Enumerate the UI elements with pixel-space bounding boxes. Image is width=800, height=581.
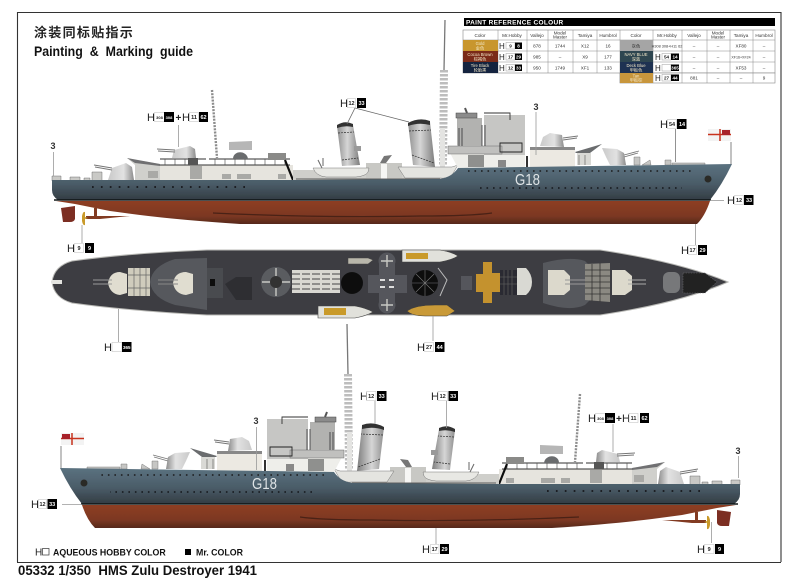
callout stern number 3 lower — [735, 446, 741, 478]
callout funnel lower aft: 33 — [450, 394, 456, 400]
legend: Mr. COLOR — [196, 548, 244, 558]
table row: Tan codes: 27 — [664, 76, 669, 80]
callout funnel lower aft — [431, 391, 458, 428]
table row: Gold codes: 9 — [509, 44, 512, 48]
callout upper aft: H308 + H11: H — [182, 112, 190, 124]
callout H17 upper — [681, 224, 707, 257]
callout lower aft: H308 + H11: 308 — [607, 416, 614, 421]
table row: Cocoa Brown codes: H — [499, 53, 505, 62]
callout H17 upper: H — [681, 245, 689, 257]
aft mast — [212, 90, 217, 158]
stern fittings plan — [52, 280, 62, 284]
paint reference table: Cocoa Brown — [467, 52, 493, 57]
portholes: forward upper row — [468, 170, 693, 172]
callout lower aft: H308 + H11 — [588, 413, 649, 452]
table row: Tire Black codes: 12 — [508, 66, 513, 70]
paint reference table: X12 — [581, 44, 590, 48]
title block: 涂装同标贴指示 — [34, 25, 134, 40]
paint reference table: Color — [631, 33, 642, 38]
torpedo deck plan — [292, 270, 340, 293]
bow mesh plan — [683, 273, 717, 293]
table row: Deck Blue codes — [655, 64, 679, 73]
table row: Navy Blue codes: H — [655, 53, 661, 62]
paint reference table: Humbrol — [755, 33, 773, 38]
paint reference table: 棕褐色 — [474, 56, 487, 62]
callout H12 bow upper: 12 — [736, 198, 742, 204]
paint reference table: Master — [553, 34, 567, 40]
turret Y plan — [93, 268, 150, 296]
portholes: aft row — [92, 186, 250, 188]
upper ship: port side profile — [52, 20, 732, 225]
callout H27 plan: H — [417, 342, 425, 354]
table row: Tire Black codes — [499, 64, 522, 73]
paint reference table: Tan — [633, 74, 640, 78]
boat plan: top with gold — [402, 250, 458, 262]
title block — [34, 25, 193, 59]
bridge plan gold — [461, 262, 532, 303]
turret A — [602, 148, 639, 165]
callout H17 lower: H — [422, 544, 430, 556]
table row: Gold codes: 8 — [517, 44, 520, 48]
paint reference table: 1749 — [555, 66, 566, 70]
aft lobe — [150, 258, 207, 310]
callout upper aft: H308 + H11: 308 — [166, 115, 173, 120]
paint reference table: 9 — [763, 76, 766, 80]
callout lower aft: H308 + H11: H — [622, 413, 630, 425]
director tower — [229, 141, 252, 150]
table row: Tire Black codes: H — [499, 64, 505, 73]
paint reference table: Master — [711, 34, 725, 40]
callout funnel lower aft: 12 — [440, 394, 446, 400]
paint reference table: Vallejo — [687, 33, 701, 38]
midships deckhouse and boats — [293, 155, 458, 180]
paint reference table: Humbrol — [599, 33, 617, 38]
paint reference table: – — [763, 54, 766, 60]
callout H12 bow lower: H — [31, 499, 39, 511]
paint reference table: Tamiya — [734, 33, 749, 38]
table row: Cocoa Brown codes — [499, 53, 522, 62]
callout funnel lower forward: 33 — [379, 394, 385, 400]
paint reference table: PAINT REFERENCE COLOUR — [466, 20, 563, 26]
paint reference table: 133 — [604, 66, 612, 70]
table row: Deck Blue codes: 365 — [671, 66, 679, 70]
callout H12 bow lower — [31, 499, 82, 511]
callout stern number 3 upper — [50, 141, 56, 176]
boat plan: forward gold — [407, 305, 455, 316]
callout H12 bow upper — [710, 195, 754, 207]
paint reference table: – — [763, 44, 766, 48]
callout H365 plan: H — [104, 342, 112, 354]
bilge keel — [213, 213, 492, 217]
capstan plan — [663, 272, 680, 293]
callout upper aft: H308 + H11: + — [176, 113, 182, 124]
footer product line: 05332 1/350 HMS Zulu Destroyer 1941 — [18, 563, 257, 578]
callout propeller upper: 9 — [88, 246, 91, 252]
callout stern number 3 lower: 3 — [735, 446, 741, 456]
paint reference table: – — [763, 66, 766, 70]
hatched deck plan — [585, 263, 610, 302]
funnel one plan — [341, 272, 363, 294]
callout lower aft: H308 + H11: + — [616, 414, 622, 425]
turret Y — [94, 163, 134, 180]
forward lobe — [543, 259, 597, 308]
deck outline — [52, 250, 728, 315]
funnel two — [408, 119, 435, 167]
callout H17 lower — [422, 528, 449, 556]
hull lower: red — [56, 201, 710, 224]
paint reference table: 灰色 — [632, 42, 641, 50]
stern fittings — [52, 172, 102, 181]
paint reference table: 985 — [533, 54, 541, 60]
turret B plan — [548, 270, 585, 295]
paint reference table: Deck Blue — [626, 63, 646, 68]
paint reference table: XF1 — [581, 66, 590, 70]
callout lower aft: H308 + H11: 62 — [641, 416, 648, 422]
table row: Cocoa Brown codes: 29 — [516, 54, 521, 60]
turret A plan — [612, 270, 646, 295]
callout H17 lower: 29 — [441, 547, 448, 553]
funnel one — [337, 122, 361, 166]
propeller shaft — [86, 208, 130, 219]
paint reference table: – — [717, 54, 720, 60]
callout funnels upper: H — [340, 98, 348, 110]
callout number 3 lower forward — [253, 416, 259, 470]
legend: H — [35, 548, 42, 558]
searchlight platform plan — [207, 267, 291, 300]
table row: Tan codes: H — [655, 74, 661, 83]
hull number lower: G18 — [252, 476, 277, 493]
paint reference table: Model — [554, 30, 566, 36]
foredeck fittings — [634, 157, 705, 165]
callout funnels upper: 12 — [348, 101, 355, 107]
rudder — [61, 206, 75, 222]
paint reference table: – — [717, 44, 720, 48]
callout H365 plan — [104, 309, 132, 354]
funnel two plan — [412, 268, 447, 296]
callout propeller upper: 9 — [77, 246, 81, 252]
callout H54 upper: H — [660, 119, 668, 131]
paint reference table: – — [559, 54, 562, 60]
boat plan: mid top — [348, 258, 373, 264]
table row: Tan codes — [655, 74, 679, 83]
paint reference table: Gold — [476, 41, 485, 46]
callout H54 upper: 54 — [669, 122, 676, 128]
paint reference table: Model — [712, 30, 724, 36]
paint reference table: NAVY BLUE — [624, 52, 648, 57]
callout funnels upper — [340, 98, 409, 124]
callout H54 upper: 14 — [679, 122, 686, 128]
callout upper aft: H308 + H11: H — [147, 112, 155, 124]
paint reference table: – — [693, 54, 696, 60]
paint reference table: 甲板棕 — [630, 76, 642, 84]
lower ship: starboard side profile — [60, 324, 740, 529]
callout upper aft: H308 + H11: 308 — [156, 115, 164, 120]
paint reference table: – — [740, 76, 743, 80]
callout funnel lower forward — [360, 391, 386, 424]
cross house plan — [368, 252, 407, 314]
table row: Deck Blue codes: H — [655, 64, 661, 73]
table row: Navy Blue codes — [655, 53, 679, 62]
paint reference table: – — [693, 44, 696, 48]
boat plan: aft bottom — [318, 306, 373, 318]
hull upper: grey — [52, 164, 732, 200]
legend: AQUEOUS HOBBY COLOR — [53, 548, 166, 558]
callout H12 bow upper: 33 — [746, 198, 752, 204]
bridge — [448, 108, 525, 168]
callout number 3 lower forward: 3 — [253, 416, 259, 426]
callout H12 bow lower: 33 — [49, 502, 55, 508]
turret X plan — [158, 272, 193, 295]
ensign — [708, 129, 731, 165]
paint reference table: 950 — [533, 66, 541, 70]
paint reference table: Vallejo — [530, 33, 544, 38]
paint reference table: XF53 — [736, 66, 747, 70]
callout upper aft: H308 + H11: 11 — [191, 115, 197, 121]
callout H54 upper — [660, 119, 686, 162]
table row: Tire Black codes: 33 — [516, 66, 521, 70]
callout number 3 upper forward — [533, 102, 539, 155]
paint reference table: XF16+XF24 — [731, 56, 751, 60]
paint reference table: Tamiya — [578, 33, 593, 38]
table row: Tan codes: 44 — [672, 76, 678, 80]
callout propeller upper: H — [67, 243, 75, 255]
callout H12 bow lower: 12 — [39, 502, 46, 508]
paint reference table: 甲板色 — [630, 66, 643, 74]
paint reference table: Tire Black — [471, 63, 490, 68]
callout propeller upper — [67, 225, 94, 255]
paint reference table: 深蓝 — [632, 56, 640, 62]
callout lower aft: H308 + H11: H — [588, 413, 596, 425]
hull number upper: G18 — [515, 172, 540, 189]
callout lower aft: H308 + H11: 11 — [631, 416, 636, 422]
turret B and forward house — [527, 133, 602, 168]
aft superstructure — [127, 141, 293, 180]
callout H17 upper: 29 — [699, 248, 706, 254]
paint reference table: Mr.Hobby — [657, 33, 678, 38]
table row: Navy Blue codes: 54 — [664, 54, 669, 60]
paint reference table: X9 — [582, 54, 588, 60]
top plan view — [52, 250, 728, 318]
portholes: forward lower row — [480, 187, 682, 189]
callout H17 upper: 17 — [689, 248, 696, 254]
table row: Gold codes — [499, 42, 522, 51]
boot topping — [54, 199, 711, 201]
paint reference table: 177 — [604, 54, 612, 60]
callout H27 plan — [417, 316, 444, 354]
paint reference table: 16 — [605, 44, 611, 48]
callout stern number 3 upper: 3 — [50, 141, 56, 151]
callout funnel lower aft: H — [431, 391, 439, 403]
anchor — [704, 176, 712, 182]
paint reference table: – — [717, 76, 720, 80]
callout propeller lower — [697, 522, 724, 556]
table row: Gold codes: H — [499, 42, 505, 51]
paint reference table: 1744 — [555, 44, 566, 48]
callout upper aft: H308 + H11: 62 — [200, 115, 207, 121]
callout funnel lower forward: H — [360, 391, 368, 403]
paint reference table: 金色 — [476, 44, 485, 50]
paint reference table: Mr.Hobby — [502, 33, 523, 38]
paint reference table: 轮胎黑 — [474, 66, 486, 74]
turret X — [157, 146, 196, 158]
paint reference table: 881 — [690, 76, 698, 80]
paint reference table: Color — [475, 33, 486, 38]
callout propeller lower: 9 — [708, 547, 711, 553]
callout funnels upper: 33 — [358, 101, 365, 107]
table row: grey mix codes: H308 308+H11 62 — [652, 44, 682, 48]
callout funnel lower forward: 12 — [368, 394, 374, 400]
callout H17 lower: 17 — [432, 547, 438, 553]
callout lower aft: H308 + H11: 308 — [597, 416, 605, 421]
callout upper aft: H308 + H11 — [147, 112, 208, 147]
main mast — [440, 20, 445, 168]
callout number 3 upper forward: 3 — [533, 102, 539, 112]
callout H27 plan: 44 — [437, 345, 444, 351]
paint reference table: 878 — [533, 44, 541, 48]
paint reference table: – — [717, 66, 720, 70]
callout H365 plan: 365 — [123, 345, 131, 350]
callout propeller lower: 9 — [718, 547, 721, 553]
table row: Cocoa Brown codes: 17 — [508, 54, 513, 60]
paint reference table — [463, 18, 775, 84]
table row: Navy Blue codes: 14 — [672, 54, 678, 60]
legend — [35, 548, 244, 558]
propeller — [82, 212, 88, 225]
title block: Painting & Marking guide — [34, 43, 193, 59]
callout H27 plan: 27 — [426, 345, 432, 351]
paint reference table: XF80 — [736, 44, 747, 48]
callout propeller lower: H — [697, 544, 705, 556]
callout H12 bow upper: H — [727, 195, 735, 207]
paint reference table: – — [693, 66, 696, 70]
